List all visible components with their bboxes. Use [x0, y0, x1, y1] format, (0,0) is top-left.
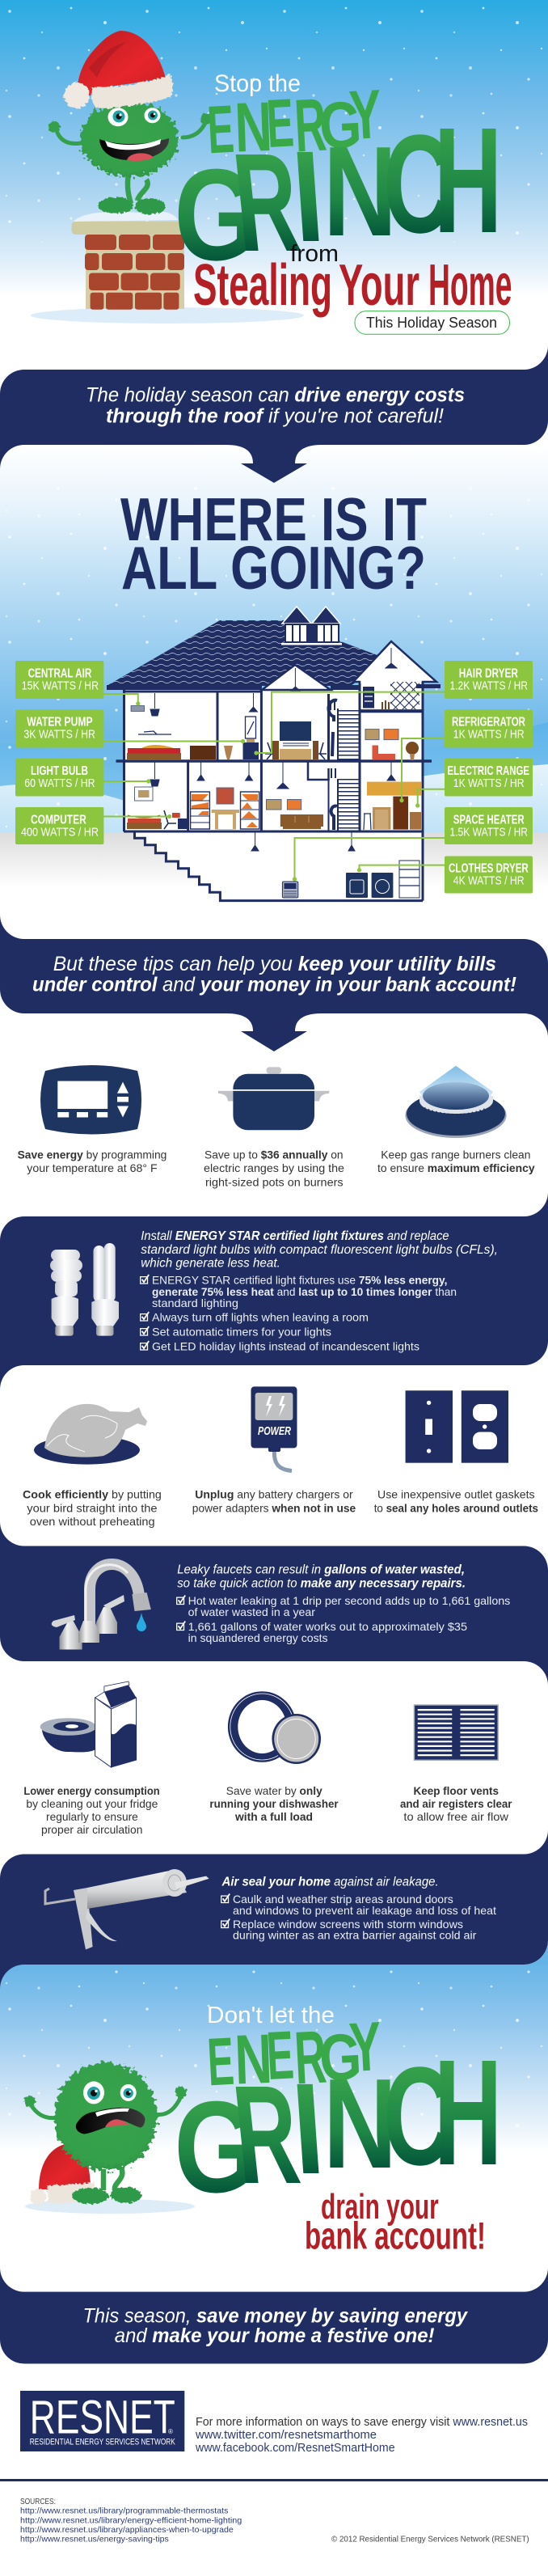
tip: cook efficiently: oven without preheating [30, 1515, 155, 1528]
ENERGY: R [293, 2016, 328, 2100]
icon: CFL bulbs [50, 1243, 119, 1336]
distant hills [0, 722, 548, 833]
tip: cook efficiently: Cook efficiently by putting [23, 1488, 162, 1501]
walls and basement shell [124, 690, 423, 901]
basement appliances [282, 861, 419, 898]
ENERGY [205, 74, 383, 168]
frown mouth [76, 2108, 145, 2134]
dormers [281, 607, 342, 645]
ENERGY: Y [348, 74, 383, 154]
label: electric range [445, 759, 533, 796]
faucet intro: so take quick action to make any necessary repairs. [177, 1576, 466, 1590]
label: computer: COMPUTER [31, 813, 86, 827]
bowl lid [40, 1718, 96, 1736]
GRINCH: N [323, 121, 397, 263]
ENERGY: R [293, 84, 328, 168]
faucet checklist: of water wasted in a year [188, 1605, 315, 1618]
tip: fridge: proper air circulation [41, 1823, 142, 1836]
air sealing text [221, 1876, 496, 1942]
sources: http://www.resnet.us/energy-saving-tips [20, 2535, 169, 2544]
ENERGY: G [318, 2020, 364, 2095]
label: light bulb [15, 759, 103, 796]
navy band 6 background [0, 2261, 548, 2364]
snow on ground [31, 307, 304, 324]
tip: thermostat: Save energy by programming [18, 1148, 167, 1161]
snow patch [25, 2199, 195, 2214]
band 1 message [86, 384, 465, 427]
middle gable [262, 665, 331, 690]
icon: dishes [228, 1691, 321, 1764]
lighting checklist: generate 75% less heat and last up to 10 times longer than [152, 1285, 457, 1298]
RESNET logo: RESIDENTIAL ENERGY SERVICES NETWORK [30, 2437, 175, 2447]
air sealing checklist [221, 1893, 496, 1942]
stick bulb [91, 1243, 119, 1326]
navy band 2 background [0, 915, 548, 1043]
roof [107, 620, 388, 686]
connector wires [103, 692, 445, 882]
navy band 1 background [0, 340, 548, 473]
label: light bulb: LIGHT BULB [31, 764, 88, 778]
more information links [195, 2415, 528, 2455]
roof shingles [107, 620, 388, 686]
tips panel 2 [0, 1365, 548, 1546]
GRINCH: N [323, 2053, 397, 2195]
stairs [331, 700, 348, 831]
hero: grinch character with santa hat [48, 31, 212, 214]
more information links: For more information on ways to save energy visit www.resnet.us [196, 2415, 528, 2429]
tip: outlet gaskets: Use inexpensive outlet gaskets [377, 1488, 535, 1501]
tip: vents: and air registers clear [400, 1797, 512, 1810]
GRINCH [174, 2028, 502, 2220]
tip: dishwasher: Save water by only [226, 1784, 322, 1797]
chimney cap [72, 222, 185, 235]
scared grinch with fallen hat [24, 2062, 195, 2214]
sources [20, 2497, 242, 2544]
tips panel 3 [0, 1661, 548, 1854]
fallen hat [39, 2143, 91, 2189]
label: space heater [445, 807, 533, 844]
ground [0, 832, 548, 887]
lighting intro [141, 1229, 498, 1271]
GRINCH: H [434, 95, 502, 264]
tongue [105, 2119, 129, 2127]
label: space heater: SPACE HEATER [453, 813, 525, 827]
snow on chimney [74, 211, 178, 222]
hero: chimney [31, 211, 304, 324]
label: hair dryer: HAIR DRYER [459, 666, 518, 680]
faucet checklist: Hot water leaking at 1 drip per second adds up to 1,661 gallons [188, 1594, 510, 1607]
ENERGY: N [234, 88, 273, 167]
near hills [0, 764, 548, 833]
band 6 message: and make your home a festive one! [115, 2324, 435, 2347]
tip: unplug [192, 1488, 356, 1514]
lighting tips text [141, 1229, 498, 1352]
eyes [108, 108, 160, 126]
house section sky panel [0, 445, 548, 939]
arrow from band 2 [226, 1013, 322, 1051]
lighting checklist [141, 1274, 457, 1352]
label: light bulb: 60 WATTS / HR [24, 776, 95, 790]
band 5 bottom right sky cap [524, 1940, 548, 1965]
legs [103, 2168, 122, 2190]
milk carton [95, 1698, 112, 1767]
hat fold [89, 42, 126, 78]
ENERGY: E [264, 2016, 296, 2094]
tip: thermostat: your temperature at 68° F [27, 1161, 158, 1174]
Stealing Your Home: Your [339, 253, 419, 318]
heading: where is it all going: ALL GOING? [121, 534, 426, 602]
more information links: www.facebook.com/ResnetSmartHome [195, 2441, 395, 2455]
icon: bowl and milk carton [40, 1681, 137, 1767]
ENERGY: Y [348, 2007, 383, 2087]
tip: dishwasher [209, 1784, 339, 1823]
heading: where is it all going [120, 485, 427, 602]
label: computer [15, 807, 103, 844]
label: central air [15, 661, 103, 699]
GRINCH: R [227, 2056, 306, 2213]
water drop [137, 1613, 146, 1631]
nozzle [175, 1876, 209, 1889]
spout head [132, 1593, 151, 1611]
tip: fridge: regularly to ensure [46, 1810, 138, 1823]
GRINCH: G [174, 2075, 258, 2220]
tip: pots: right-sized pots on burners [205, 1175, 344, 1188]
air sealing intro: Air seal your home against air leakage. [221, 1876, 439, 1889]
icon: leaky faucet [52, 1564, 151, 1650]
band 6 message [82, 2305, 468, 2347]
tip: vents: to allow free air flow [403, 1810, 509, 1823]
tip: cook efficiently: your bird straight into the [27, 1501, 158, 1514]
faucet checklist: in squandered energy costs [188, 1631, 328, 1644]
teeth [95, 2109, 129, 2117]
santa hat [78, 31, 166, 95]
chimney bricks [85, 235, 184, 310]
faucet intro [177, 1563, 466, 1590]
label: hair dryer [445, 661, 533, 699]
icon: gas burner [405, 1066, 507, 1138]
This Holiday Season pill [355, 311, 509, 334]
GRINCH: I [288, 125, 328, 269]
label: refrigerator: 1K WATTS / HR [453, 728, 525, 742]
tip: cook efficiently [23, 1488, 162, 1528]
ENERGY: G [318, 87, 364, 163]
lower-floor furniture [127, 782, 421, 830]
faucet tips text [177, 1563, 510, 1644]
band 2 message: But these tips can help you keep your utility bills [53, 953, 496, 975]
smile [99, 138, 169, 160]
closing title [174, 2003, 502, 2257]
furry body [80, 101, 179, 177]
tip: outlet gaskets: to seal any holes around outlets [374, 1501, 538, 1514]
tip: vents: Keep floor vents [414, 1784, 499, 1797]
sources: http://www.resnet.us/library/programmable-thermostats [20, 2506, 228, 2516]
hero title [174, 70, 512, 334]
label: clothes dryer: 4K WATTS / HR [453, 874, 525, 888]
faucet checklist: 1,661 gallons of water works out to approximately $35 [188, 1620, 467, 1633]
tip: burners [377, 1148, 535, 1174]
air sealing checklist: during winter as an extra barrier against cold air [233, 1929, 477, 1942]
icon: caulk gun [45, 1869, 209, 1949]
label: water pump: 3K WATTS / HR [23, 728, 95, 742]
tip: pots: electric ranges by using the [204, 1161, 344, 1174]
RESNET logo: RESNET [30, 2391, 175, 2444]
handle [74, 1888, 93, 1949]
label: water pump [15, 710, 103, 747]
hands [48, 121, 60, 133]
air sealing checklist: Replace window screens with storm windows [233, 1918, 463, 1931]
teeth [105, 139, 161, 150]
ENERGY: E [205, 91, 236, 168]
tip: fridge: by cleaning out your fridge [26, 1797, 158, 1810]
fallen hat brim [47, 2183, 95, 2204]
body [54, 2062, 158, 2171]
lighting checklist: Set automatic timers for your lights [152, 1326, 331, 1339]
band 1 message: The holiday season can drive energy costs [86, 384, 465, 407]
tip: fridge: Lower energy consumption [23, 1784, 160, 1797]
lighting checklist: standard lighting [152, 1296, 238, 1309]
lighting checklist: Always turn off lights when leaving a room [152, 1310, 369, 1323]
GRINCH: C [383, 107, 453, 262]
spiral bulb [50, 1250, 82, 1326]
feet [98, 197, 133, 214]
label: refrigerator [445, 710, 533, 747]
closing snowfall [0, 1965, 548, 2142]
ENERGY: E [264, 84, 296, 162]
heading: where is it all going: WHERE IS IT [120, 485, 427, 553]
label: central air: 15K WATTS / HR [22, 679, 99, 693]
GRINCH: H [434, 2028, 502, 2197]
band 1 message: through the roof if you're not careful! [106, 404, 444, 427]
Stop the: Stop the [214, 70, 301, 97]
navy band 3 background [0, 1189, 548, 1391]
GRINCH: R [227, 124, 306, 281]
label: hair dryer: 1.2K WATTS / HR [449, 679, 528, 693]
Stealing Your Home: Stealing [193, 253, 332, 318]
label: refrigerator: REFRIGERATOR [452, 716, 525, 730]
rod and hook [45, 1889, 75, 1904]
tip: burners: Keep gas range burners clean [381, 1148, 530, 1161]
lighting intro: which generate less heat. [141, 1257, 280, 1271]
sources: http://www.resnet.us/library/appliances-when-to-upgrade [20, 2525, 234, 2535]
eyes [83, 2081, 137, 2104]
fallen hat pompom [30, 2189, 46, 2205]
RESNET logo [20, 2391, 184, 2451]
tongue [127, 153, 154, 161]
lighting checklist: Get LED holiday lights instead of incandescent lights [152, 1339, 419, 1352]
chimney mortar [86, 233, 184, 309]
band 6 message: This season, save money by saving energy [82, 2305, 468, 2328]
hat fur brim [91, 74, 173, 108]
label: computer: 400 WATTS / HR [21, 826, 99, 840]
faucet neck [90, 1564, 139, 1631]
house cutaway illustration [107, 607, 441, 901]
faucet checklist [177, 1594, 510, 1644]
from: from [290, 241, 339, 267]
lighting checklist: ENERGY STAR certified light fixtures use 75% less energy, [152, 1274, 448, 1287]
right tap [96, 1607, 117, 1634]
air sealing checklist: Caulk and weather strip areas around doors [233, 1893, 453, 1906]
drain your bank account: drain your [321, 2187, 439, 2227]
lighting intro: standard light bulbs with compact fluorescent light bulbs (CFLs), [141, 1243, 498, 1257]
eaves [107, 684, 441, 690]
icon: floor vent [414, 1705, 498, 1760]
navy band 5 background [0, 1824, 548, 1994]
label: clothes dryer [445, 856, 533, 893]
tips panel 1 [0, 1013, 548, 1216]
footer divider [0, 2479, 548, 2481]
feet [72, 2188, 109, 2204]
lower snow and ground [0, 722, 548, 939]
faucet base [78, 1621, 99, 1643]
icon: cooking pot [218, 1067, 329, 1130]
right gable [353, 641, 436, 712]
GRINCH: G [174, 142, 258, 288]
hat pompom [64, 82, 90, 108]
top-floor furniture [127, 682, 419, 760]
arms [57, 123, 205, 143]
air sealing checklist: and windows to prevent air leakage and loss of heat [233, 1904, 496, 1917]
label: water pump: WATER PUMP [27, 716, 93, 730]
tip: dishwasher: with a full load [234, 1810, 313, 1823]
tip: outlet gaskets [374, 1488, 538, 1514]
arms [31, 2096, 181, 2118]
bowl [42, 1730, 95, 1752]
This Holiday Season pill: This Holiday Season [366, 315, 497, 331]
house section snowfall [0, 485, 548, 833]
tip: burners: to ensure maximum efficiency [377, 1161, 535, 1174]
lighting intro: Install ENERGY STAR certified light fixtures and replace [141, 1229, 449, 1243]
left tap [60, 1620, 82, 1650]
tip: dishwasher: running your dishwasher [209, 1797, 339, 1810]
pendant lights and fans [150, 648, 397, 851]
sources: http://www.resnet.us/library/energy-efficient-home-lighting [20, 2515, 242, 2525]
sources: SOURCES: [20, 2497, 56, 2506]
hands [24, 2096, 36, 2107]
GRINCH [174, 95, 502, 288]
band 2 message: under control and your money in your bank account! [32, 973, 516, 996]
icon: roast turkey [34, 1404, 147, 1465]
tube cap [162, 1869, 187, 1897]
tip: pots [204, 1148, 344, 1188]
tip: vents [400, 1784, 512, 1823]
tip: pots: Save up to $36 annually on [204, 1148, 344, 1161]
icon: power adapter: POWER [258, 1424, 291, 1438]
tip: unplug: Unplug any battery chargers or [195, 1488, 353, 1501]
arrow from band 1 [226, 445, 322, 483]
tip: thermostat [18, 1148, 167, 1174]
Don't let the: Don't let the [207, 2003, 335, 2028]
navy fill under sky panel top-left [0, 1965, 27, 1992]
icon: outlet and switch plates [406, 1390, 508, 1463]
ENERGY [205, 2007, 383, 2100]
label: electric range: 1K WATTS / HR [453, 776, 525, 790]
icon: power adapter [251, 1386, 297, 1470]
ENERGY: N [234, 2020, 273, 2100]
rounded bottom-left of house panel [0, 910, 32, 939]
RESNET logo: ® [168, 2428, 173, 2435]
drain your bank account [305, 2187, 486, 2257]
GRINCH: C [383, 2039, 453, 2194]
structure lines [116, 682, 432, 901]
tip: fridge [23, 1784, 160, 1836]
navy band 4 background [0, 1521, 548, 1690]
GRINCH: I [288, 2058, 328, 2202]
closing sky panel [0, 1965, 548, 2292]
label: space heater: 1.5K WATTS / HR [449, 826, 528, 840]
legs [128, 174, 148, 204]
icon: thermostat [40, 1065, 141, 1134]
tip: unplug: power adapters when not in use [192, 1501, 356, 1514]
hero sky panel [0, 0, 548, 370]
band 2 message [32, 953, 516, 996]
copyright: © 2012 Residential Energy Services Network (RESNET) [331, 2535, 529, 2544]
faucet intro: Leaky faucets can result in gallons of water wasted, [177, 1563, 465, 1577]
label: central air: CENTRAL AIR [28, 666, 91, 680]
hero snowfall [0, 0, 548, 243]
trigger [86, 1910, 117, 1941]
more information links: www.twitter.com/resnetsmarthome [195, 2428, 377, 2442]
ENERGY: E [205, 2024, 236, 2100]
tube [87, 1870, 187, 1909]
